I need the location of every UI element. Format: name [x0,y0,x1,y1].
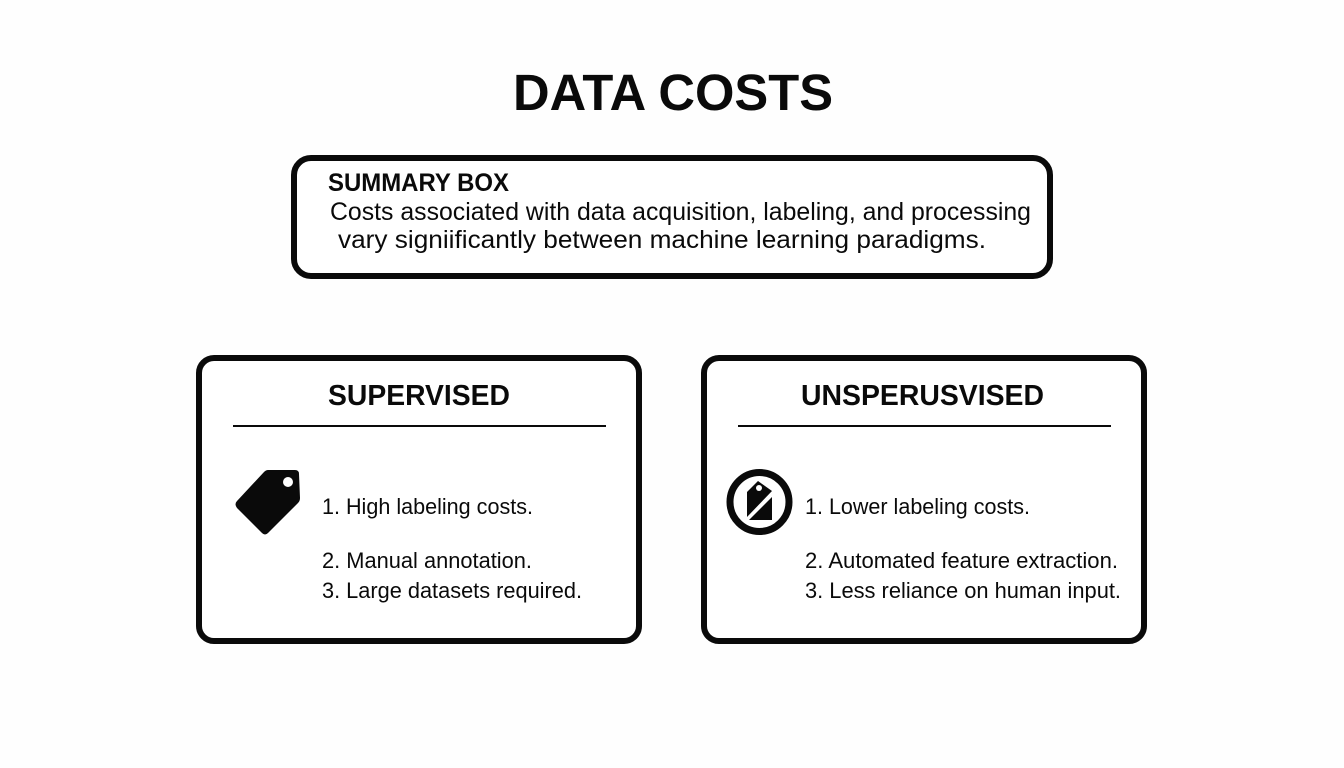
supervised list: 2. Manual annotation. [322,548,532,573]
title: DATA COSTS [513,64,833,121]
icon: crossed-out tag [730,472,789,532]
unsupervised list: 3. Less reliance on human input. [805,578,1121,603]
unsupervised list: 1. Lower labeling costs. [805,494,1030,519]
icon: price tag [236,470,300,534]
unsupervised list [805,494,1121,603]
supervised list: 1. High labeling costs. [322,494,533,519]
summary text: Costs associated with data acquisition, labeling, and processing [330,198,1031,226]
summary text [330,198,1031,254]
supervised list: 3. Large datasets required. [322,578,582,603]
supervised list [322,494,582,603]
summary heading: SUMMARY BOX [328,169,509,197]
summary text: vary signiificantly between machine learning paradigms. [338,226,986,254]
panel: supervised [199,358,639,641]
supervised heading: SUPERVISED [328,380,510,412]
panel: summary box [294,158,1050,276]
unsupervised list: 2. Automated feature extraction. [805,548,1118,573]
panel: unsupervised [704,358,1144,641]
unsupervised heading: UNSPERUSVISED [801,380,1044,412]
